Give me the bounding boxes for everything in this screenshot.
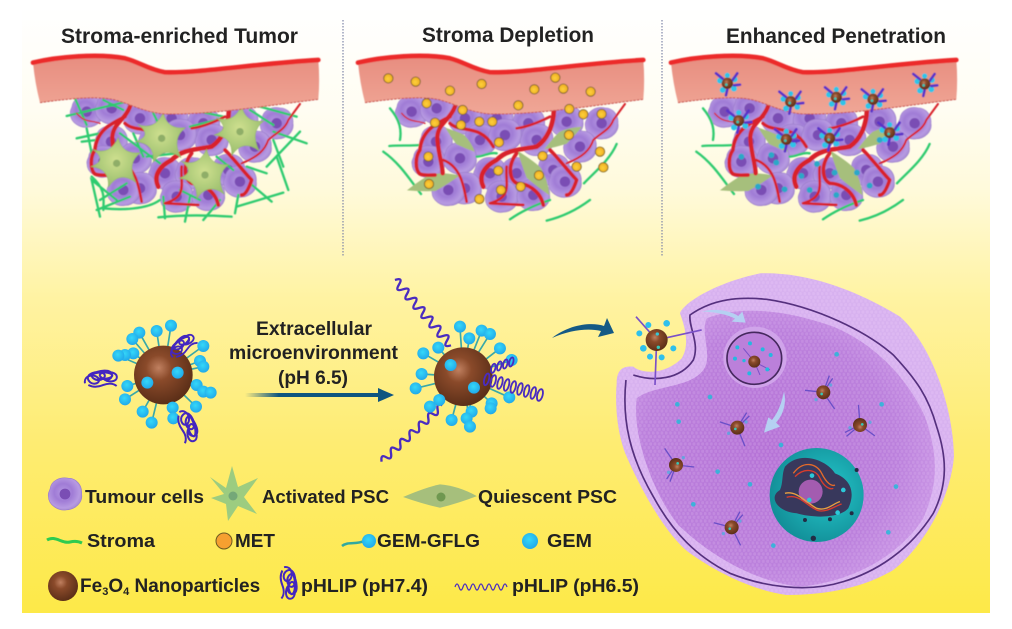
activated PSC stars — [91, 106, 264, 199]
legend: GEM — [522, 530, 592, 551]
arteries — [402, 104, 625, 205]
legend: pHLIP pH 7.4: pHLIP (pH7.4) — [301, 575, 428, 596]
incoming nanoparticle at membrane pit — [636, 317, 702, 385]
legend: MET: MET — [235, 530, 276, 551]
cancer cell cross-section — [616, 273, 954, 595]
membrane dark line — [625, 298, 944, 588]
tumour cells — [708, 93, 931, 212]
GEM stalks — [416, 327, 512, 427]
extended pHLIP chains — [381, 279, 451, 462]
blood vessel — [358, 56, 644, 114]
legend: activated PSC: Activated PSC — [262, 486, 389, 507]
panel: stroma depletion — [358, 56, 644, 221]
legend: activated PSC — [210, 466, 389, 521]
arteries — [77, 104, 300, 205]
legend: quiescent PSC: Quiescent PSC — [478, 486, 617, 507]
title: stroma depletion: Stroma Depletion — [422, 23, 594, 47]
panel: stroma-enriched tumor — [33, 56, 319, 222]
helical pHLIP — [483, 357, 544, 401]
legend — [47, 466, 639, 601]
arrow label: extracellular microenvironment: Extracellular — [256, 319, 373, 340]
legend: Fe3O4 nanoparticles — [48, 571, 260, 601]
arrow label: extracellular microenvironment — [229, 319, 399, 389]
legend: Fe3O4 nanoparticles: Nanoparticles — [129, 576, 260, 597]
arteries — [715, 104, 938, 205]
released GEM dots — [738, 137, 883, 198]
GEM balls — [112, 320, 217, 429]
nucleus with DNA — [770, 448, 864, 542]
title: stroma-enriched tumor: Stroma-enriched Tumor — [61, 24, 299, 48]
legend: stroma: Stroma — [87, 530, 156, 551]
stroma network — [67, 98, 307, 222]
free GEM dots — [675, 352, 898, 548]
nanoparticles — [716, 73, 937, 151]
endosome vesicle — [723, 327, 787, 388]
quiescent PSCs — [718, 121, 898, 200]
remaining stroma — [696, 108, 930, 221]
tumour cells — [70, 93, 293, 212]
legend: quiescent PSC — [403, 484, 617, 508]
iron oxide core — [434, 347, 493, 406]
legend: GEM-GFLG: GEM-GFLG — [377, 530, 480, 551]
curved arrows — [702, 310, 785, 433]
legend: pHLIP pH 6.5: pHLIP (pH6.5) — [512, 575, 639, 596]
legend: Fe3O4 nanoparticles: 3 — [102, 586, 108, 598]
legend: stroma — [47, 530, 156, 551]
arrow: pH transition — [245, 388, 394, 402]
nanoparticle with extended pHLIP at pH 6.5 — [381, 279, 544, 462]
blood vessel — [671, 56, 957, 114]
legend: MET — [216, 530, 276, 551]
tumour cells — [395, 93, 618, 212]
coiled pHLIP chains — [85, 332, 200, 444]
legend: Fe3O4 nanoparticles: 4 — [123, 586, 130, 598]
title: enhanced penetration: Enhanced Penetration — [726, 24, 946, 48]
quiescent PSCs — [405, 121, 585, 200]
legend: pHLIP pH 6.5 — [455, 575, 639, 596]
legend: tumour cells — [48, 478, 204, 510]
panel: enhanced penetration — [671, 56, 957, 221]
iron oxide core — [134, 346, 193, 404]
cell interior — [636, 311, 935, 587]
legend: tumour cells: Tumour cells — [85, 486, 204, 507]
nanoparticle with coiled pHLIP at pH 7.4 — [85, 320, 217, 444]
arrow: uptake into cell — [552, 318, 614, 338]
GEM balls — [410, 321, 518, 433]
legend: Fe3O4 nanoparticles: O — [108, 576, 123, 597]
remaining stroma — [383, 108, 617, 221]
legend: pHLIP pH 7.4 — [281, 567, 428, 599]
GEM stalks — [118, 326, 211, 423]
MET dots — [384, 73, 608, 204]
arrow label: extracellular microenvironment: (pH 6.5) — [278, 368, 348, 389]
nanoparticles in cytoplasm — [665, 376, 884, 545]
outer membrane — [616, 273, 954, 595]
blood vessel — [33, 56, 319, 114]
legend: Fe3O4 nanoparticles: Fe — [80, 576, 102, 597]
legend: GEM: GEM — [547, 530, 592, 551]
arrow label: extracellular microenvironment: microenvironment — [229, 343, 399, 364]
